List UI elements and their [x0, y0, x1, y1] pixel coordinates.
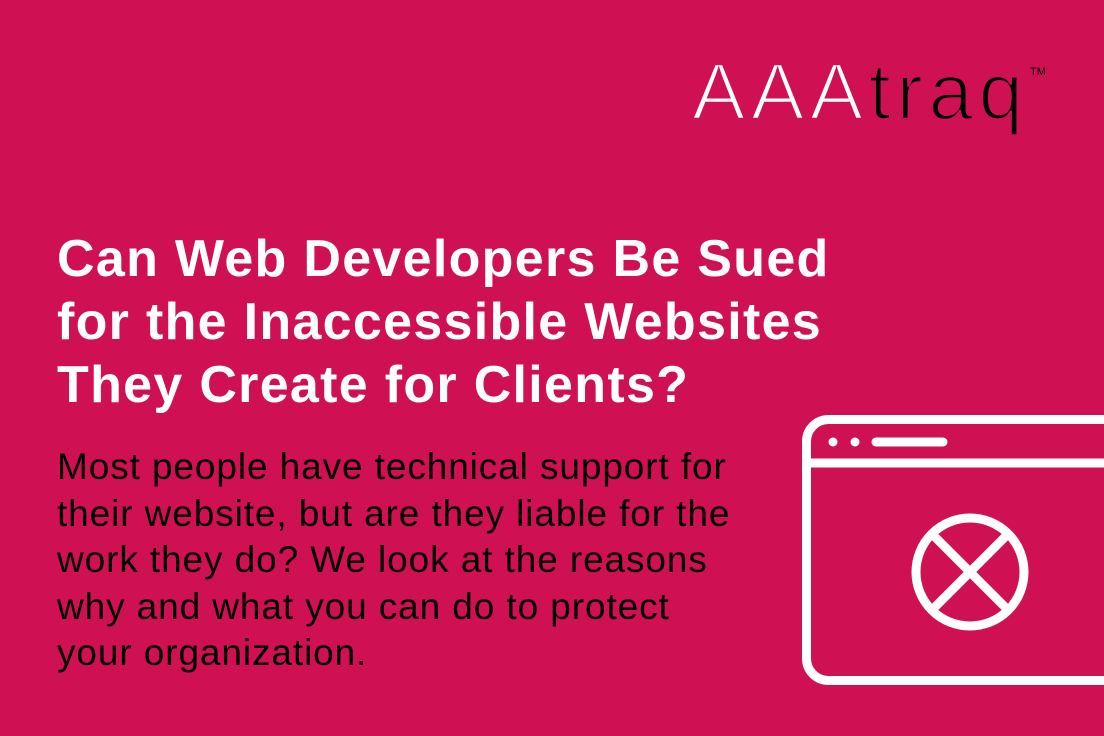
title: They Create for Clients? — [57, 356, 689, 414]
body text: why and what you can do to protect — [57, 586, 670, 626]
body text: Most people have technical support for — [57, 446, 727, 487]
body text: their website, but are they liable for the — [57, 492, 730, 534]
title: Can Web Developers Be Sued — [57, 230, 830, 288]
body text — [57, 446, 730, 673]
title — [57, 230, 830, 414]
title: for the Inaccessible Websites — [57, 293, 822, 351]
body text: work they do? We look at the reasons — [57, 539, 708, 580]
logo: AAAtraq — [692, 47, 1028, 136]
body text: your organization. — [57, 632, 367, 673]
trademark: TM — [1030, 66, 1046, 78]
